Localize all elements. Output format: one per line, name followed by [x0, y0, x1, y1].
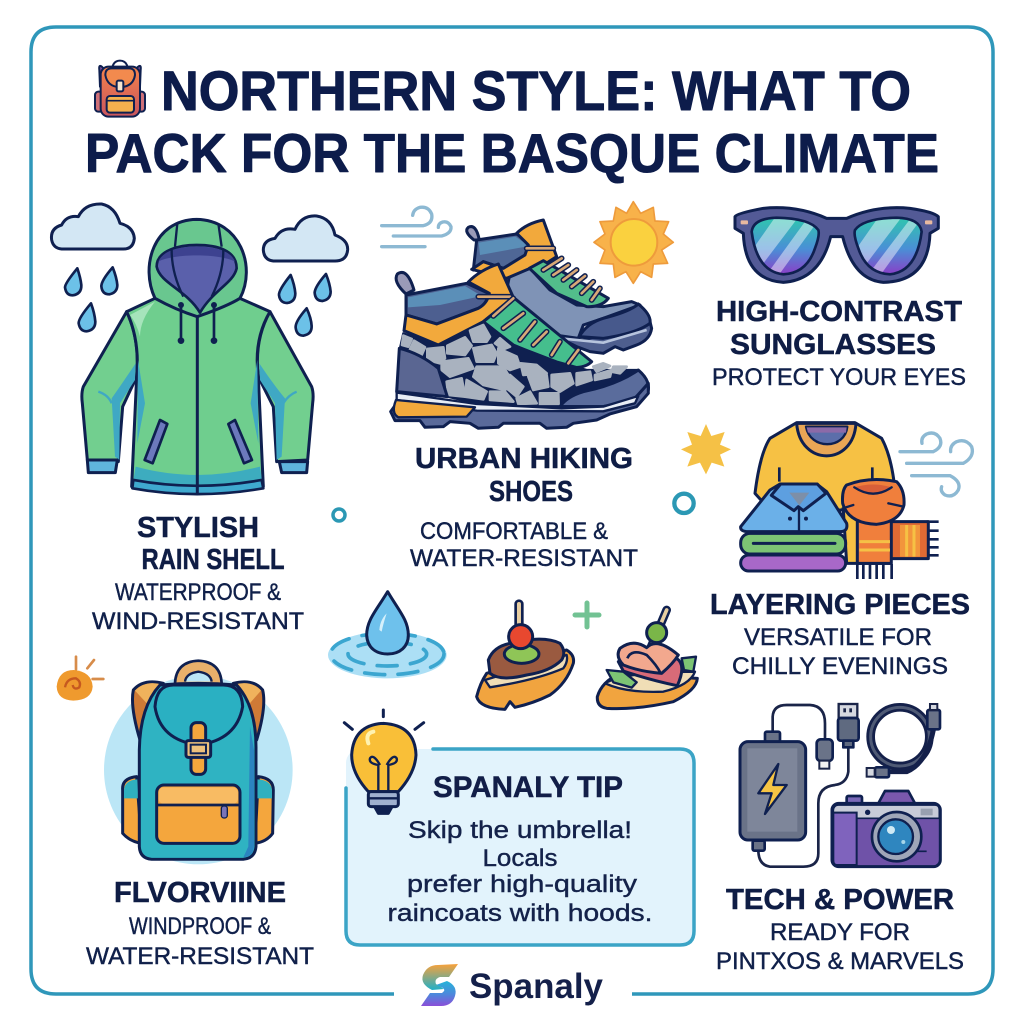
icon: water drop and puddle — [328, 592, 447, 678]
text: waterproof and wind-resistant — [92, 579, 304, 635]
text: tip body: prefer high-quality — [407, 871, 637, 898]
text: comfortable and water-resistant: COMFORTABLE & — [420, 518, 608, 545]
heading: urban hiking shoes: SHOES — [489, 476, 573, 508]
text: tip body: Skip the umbrella! — [408, 817, 632, 844]
icon: small ring — [333, 509, 345, 521]
title — [85, 59, 939, 184]
wordmark: Spanaly — [469, 967, 604, 1006]
icon: plus — [575, 603, 599, 627]
text: comfortable and water-resistant: WATER-RESISTANT — [410, 545, 638, 572]
text: protect your eyes: PROTECT YOUR EYES — [712, 364, 966, 391]
icon: lightbulb — [344, 710, 424, 813]
icon: rain jacket with clouds — [51, 204, 348, 495]
icon: power bank, cable and camera — [740, 704, 940, 867]
text: windproof and water-resistant: WATER-RESISTANT — [86, 943, 314, 970]
heading: stylish rain shell — [137, 512, 284, 576]
text: waterproof and wind-resistant: WATERPROOF & — [115, 579, 281, 606]
front shoe — [396, 272, 414, 294]
icon: title backpack — [95, 61, 145, 117]
text: tip body — [388, 817, 652, 927]
panel: tech and power — [716, 704, 964, 975]
panel: rain shell — [51, 204, 348, 635]
heading: high-contrast sunglasses: HIGH-CONTRAST — [716, 296, 962, 328]
text: windproof and water-resistant: WINDPROOF & — [129, 913, 271, 940]
text: versatile for chilly evenings: VERSATILE FOR — [744, 624, 932, 651]
panel: backpack — [57, 657, 314, 970]
text: versatile for chilly evenings — [732, 624, 948, 680]
title: PACK FOR THE BASQUE CLIMATE — [85, 122, 939, 184]
text: comfortable and water-resistant — [410, 518, 638, 572]
text: tip body: Locals — [482, 845, 558, 872]
heading: tech and power: TECH & POWER — [726, 884, 954, 916]
text: windproof and water-resistant — [86, 913, 314, 970]
panel: spanaly tip — [344, 710, 694, 945]
heading: stylish rain shell: RAIN SHELL — [142, 544, 284, 576]
heading: high-contrast sunglasses — [716, 296, 962, 361]
heading: spanaly tip: SPANALY TIP — [433, 771, 623, 804]
panel: layering pieces — [674, 423, 972, 680]
icon: small sun spiral — [57, 657, 103, 701]
text: versatile for chilly evenings: CHILLY EVENINGS — [732, 653, 948, 680]
back shoe — [467, 227, 479, 240]
panel: sunglasses — [712, 208, 966, 391]
text: ready for pintxos and marvels — [716, 919, 964, 975]
icon: stacked layers and scarf — [674, 423, 972, 579]
heading: high-contrast sunglasses: SUNGLASSES — [730, 329, 936, 361]
text: waterproof and wind-resistant: WIND-RESISTANT — [92, 608, 304, 635]
logo: Spanaly — [421, 964, 604, 1006]
icon: sunglasses — [735, 208, 938, 282]
text: ready for pintxos and marvels: PINTXOS & MARVELS — [716, 948, 964, 975]
text: ready for pintxos and marvels: READY FOR — [770, 919, 910, 946]
heading: urban hiking shoes — [415, 443, 633, 508]
icon: pintxo two — [597, 610, 697, 709]
tip box — [346, 749, 694, 945]
heading: flvorviine: FLVORVIINE — [114, 877, 286, 909]
icon: logo mark — [421, 964, 458, 1006]
title: NORTHERN STYLE: WHAT TO — [161, 59, 911, 122]
panel: urban hiking shoes — [382, 202, 673, 572]
icon: pintxo one — [477, 604, 574, 709]
heading: stylish rain shell: STYLISH — [137, 512, 259, 544]
heading: urban hiking shoes: URBAN HIKING — [415, 443, 633, 475]
icon: backpack — [104, 661, 293, 864]
heading: layering pieces: LAYERING PIECES — [710, 589, 970, 621]
text: tip body: raincoats with hoods. — [388, 900, 652, 927]
icon: hiking shoes with wind and sun — [382, 202, 673, 428]
